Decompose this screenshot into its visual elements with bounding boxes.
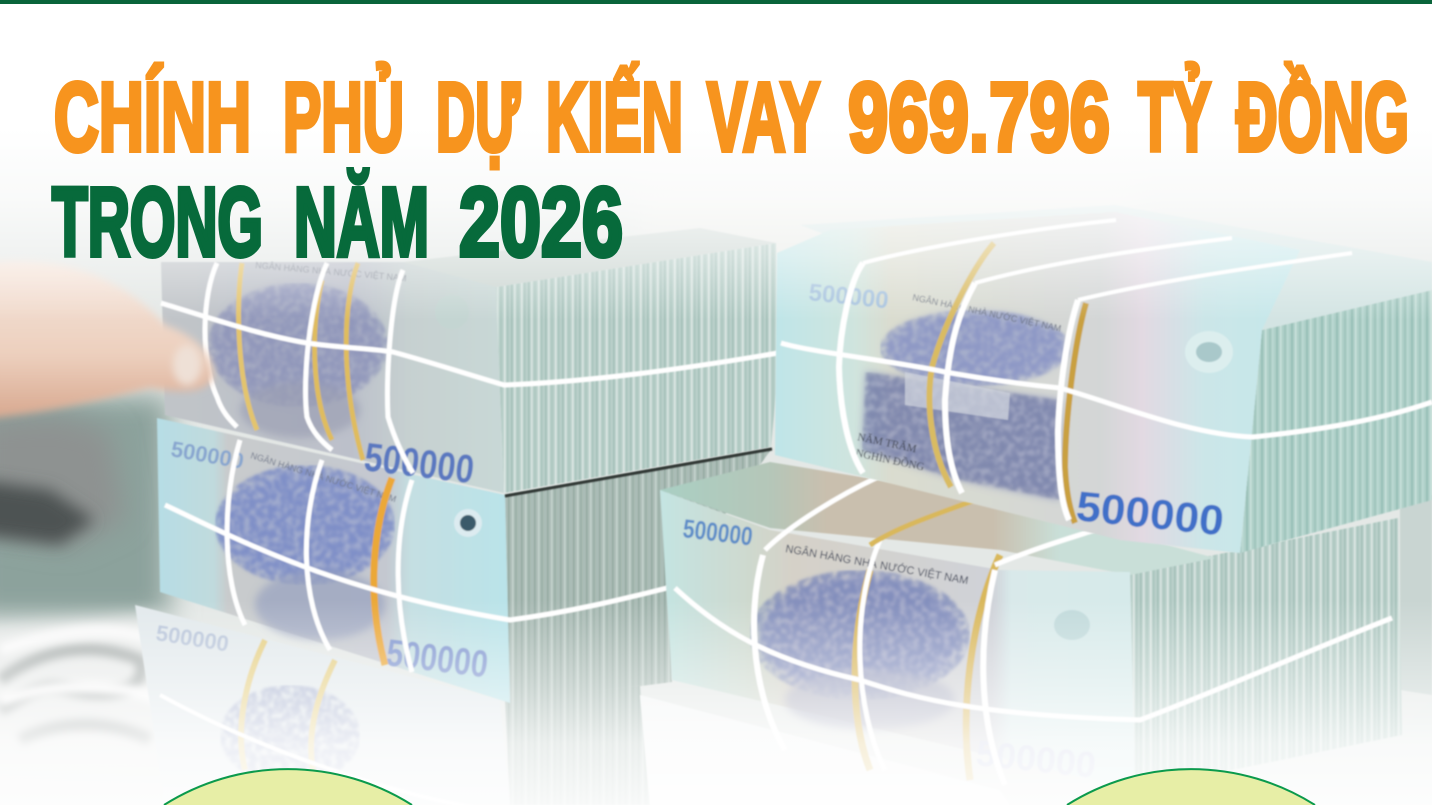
title line 2: green: 2026 [459, 168, 623, 276]
photo: middle-left money stack [157, 418, 772, 703]
right green circle panel [1067, 769, 1315, 805]
photo: top-right money stack: NGHÌN ĐỒNG [854, 446, 926, 473]
photo: middle-left money stack: 500000 [384, 632, 490, 686]
photo fade: top white gradient [0, 0, 1432, 320]
photo: top-right money stack: NĂM TRĂM [856, 431, 918, 455]
title line 2: green: NĂM [294, 168, 429, 276]
title line 2: green: TRONG [52, 168, 263, 276]
title line 1: orange: DỰ [436, 62, 520, 172]
photo: faded bottom-left money stack: 500000 [154, 620, 231, 656]
dark gap between left stacks [505, 449, 772, 496]
photo: hand holding the stack [0, 261, 213, 418]
photo: lower-centre money stack: NGÂN HÀNG NHÀ NƯỚC VIỆT NAM [784, 542, 969, 587]
photo: top-right money stack: 500000 [807, 279, 890, 314]
title line 1: orange: PHỦ [283, 62, 404, 172]
photo: faded bottom-left money stack [135, 605, 650, 805]
photo: top-right money stack: 500000 [1074, 482, 1226, 544]
photo: top-left money stack: 500000 [362, 435, 476, 492]
photo: middle-left money stack: 500000 [169, 436, 246, 474]
photo: top-right money stack: NGÂN HÀNG NHÀ NƯỚC VIỆT NAM [912, 292, 1062, 334]
photo: top-left money stack [161, 228, 780, 493]
photo: top-left money stack: NGÂN HÀNG NHÀ NƯỚC VIỆT NAM [255, 260, 407, 283]
title line 1: orange: KIẾN [546, 62, 683, 172]
photo: lower-centre money stack: 500000 [974, 732, 1098, 786]
photo: bottom-right faded money stack [640, 495, 1432, 805]
left green circle panel [164, 769, 412, 805]
photo: lower-centre money stack [660, 462, 1402, 790]
title line 1: orange: CHÍNH [54, 62, 251, 172]
title [52, 62, 1409, 276]
title line 1: orange: VAY [707, 62, 820, 172]
top green bar [0, 0, 1432, 4]
photo: top-right money stack [775, 205, 1432, 553]
title line 1: orange [54, 62, 1409, 172]
title line 2: green [52, 168, 623, 276]
title line 1: orange: TỶ [1138, 62, 1211, 172]
photo fade: bottom white gradient [0, 600, 1432, 805]
title line 1: orange: 969.796 [848, 62, 1110, 172]
photo: middle-left money stack: NGÂN HÀNG NHÀ NƯỚC VIỆT NAM [249, 450, 397, 504]
photo: lower-centre money stack: 500000 [681, 513, 754, 551]
